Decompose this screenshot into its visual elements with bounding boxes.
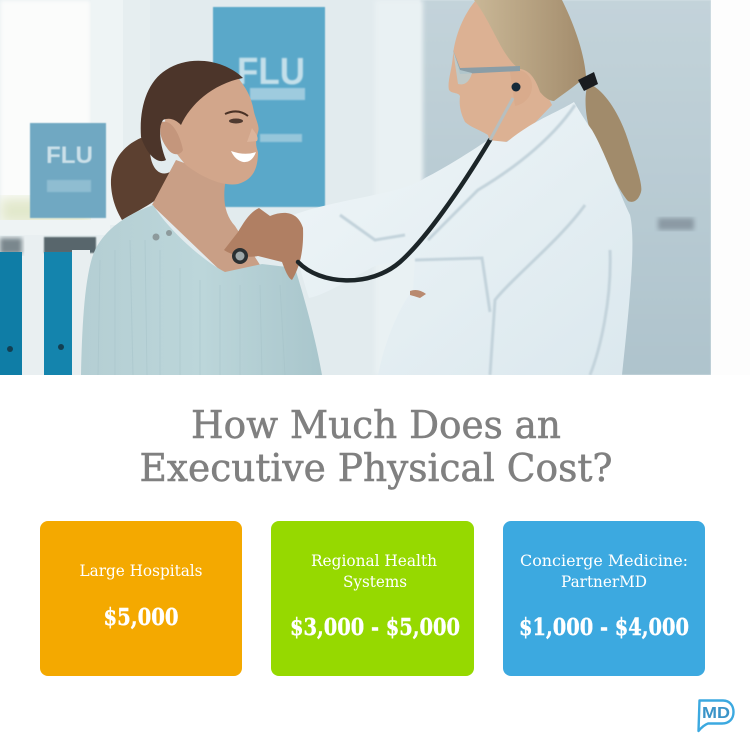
patient: ponytail hair xyxy=(111,136,170,220)
panel: Large Hospitals xyxy=(40,521,242,676)
panel: Regional Health Systems: Regional Health xyxy=(311,551,437,570)
photo: doctor examining patient xyxy=(0,0,750,375)
doctor: hand on stethoscope xyxy=(224,208,303,280)
blue flu poster on wall: FLU xyxy=(237,51,305,93)
sweater buttons xyxy=(152,230,172,240)
doctor: hand behind coat xyxy=(410,290,426,298)
panel: Concierge Medicine: PartnerMD: $1,000 - $4,000 xyxy=(519,614,689,641)
doctor: ear xyxy=(510,70,532,106)
panel: Concierge Medicine: PartnerMD: Concierge Medicine: xyxy=(520,551,688,570)
icon: MD speech bubble logo xyxy=(698,700,734,731)
doctor: neck and face xyxy=(449,0,552,150)
panel: Regional Health Systems: $3,000 - $5,000 xyxy=(290,614,460,641)
title xyxy=(140,403,612,490)
stethoscope tubing xyxy=(232,82,520,280)
patient: sweater xyxy=(81,205,322,375)
patient: neck and chest xyxy=(152,160,262,275)
doctor: white coat xyxy=(292,102,632,375)
panel: Large Hospitals: Large Hospitals xyxy=(80,561,202,580)
panel: Concierge Medicine: PartnerMD xyxy=(503,521,705,676)
doctor: ponytail xyxy=(586,83,641,202)
patient: ear xyxy=(160,122,183,154)
title: How Much Does an xyxy=(191,403,561,447)
coat folds xyxy=(340,105,610,375)
panel: Regional Health Systems: Systems xyxy=(343,572,407,591)
icon: MD speech bubble logo: MD xyxy=(702,705,730,722)
panel: Large Hospitals: $5,000 xyxy=(104,604,178,631)
doctor: hair xyxy=(474,0,586,101)
panel: Regional Health Systems xyxy=(271,521,474,676)
photo background: clinic room xyxy=(0,0,750,375)
panel: Concierge Medicine: PartnerMD: PartnerMD xyxy=(561,572,647,591)
title: Executive Physical Cost? xyxy=(140,446,612,490)
doctor: glasses xyxy=(453,50,520,74)
blue binders on shelf xyxy=(0,250,90,375)
small blue flu sign on shelf xyxy=(30,123,106,218)
patient: eye, smile xyxy=(225,111,258,162)
patient: face xyxy=(165,75,259,185)
small blue flu sign on shelf: FLU xyxy=(46,142,93,169)
patient: hair on head xyxy=(141,61,243,161)
blue flu poster on wall xyxy=(213,7,325,207)
